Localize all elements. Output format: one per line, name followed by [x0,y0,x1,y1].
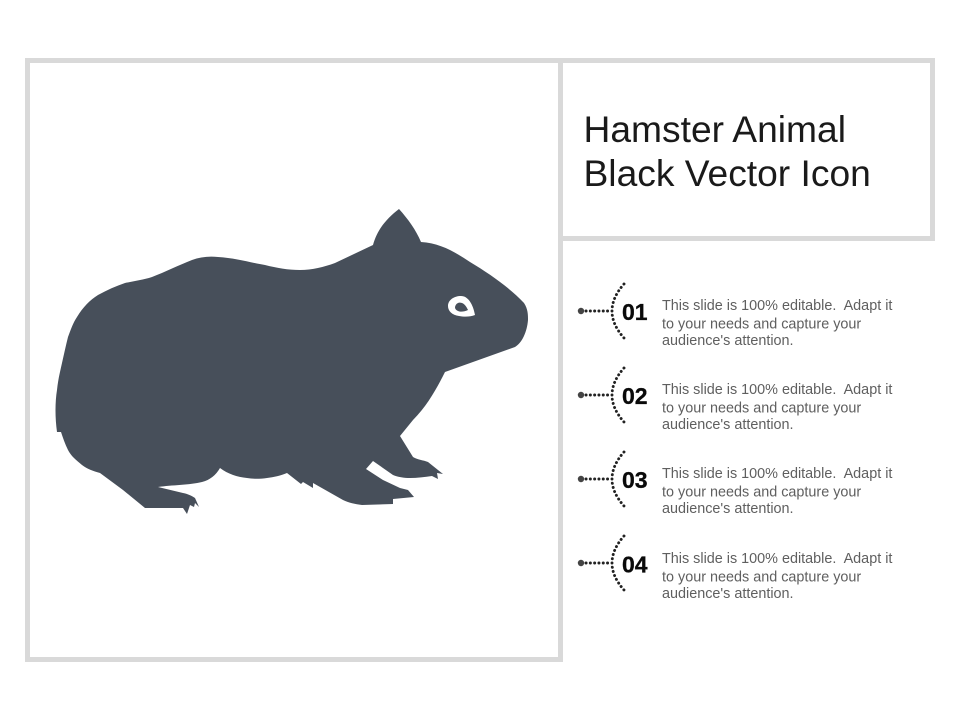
list item 02: 02 [622,383,648,409]
list item 01 [578,284,892,349]
list item 03: to your needs and capture your [662,484,861,500]
list item 04 [578,536,892,602]
list item 01: to your needs and capture your [662,316,861,332]
list item 03: audience's attention. [662,501,794,517]
panel: image frame [28,60,560,660]
icon: hamster eye [448,296,475,317]
panel: title frame [560,60,932,238]
list item 03: 03 [622,467,648,493]
list item 02: audience's attention. [662,417,794,433]
list item 04: audience's attention. [662,586,794,602]
list item 04: to your needs and capture your [662,570,861,586]
title [584,108,871,194]
list item 03: This slide is 100% editable. Adapt it [662,466,892,482]
list item 01: 01 [622,299,648,325]
list item 04: This slide is 100% editable. Adapt it [662,551,892,567]
list item 01: audience's attention. [662,333,794,349]
list item 03 [578,452,892,517]
list item 01: This slide is 100% editable. Adapt it [662,298,892,314]
title: Hamster Animal [584,108,846,150]
icon: hamster silhouette [56,209,528,514]
list item 02: to your needs and capture your [662,400,861,416]
list item 02 [578,368,892,433]
list item 04: 04 [622,552,648,578]
list item 02: This slide is 100% editable. Adapt it [662,382,892,398]
title: Black Vector Icon [584,152,871,194]
